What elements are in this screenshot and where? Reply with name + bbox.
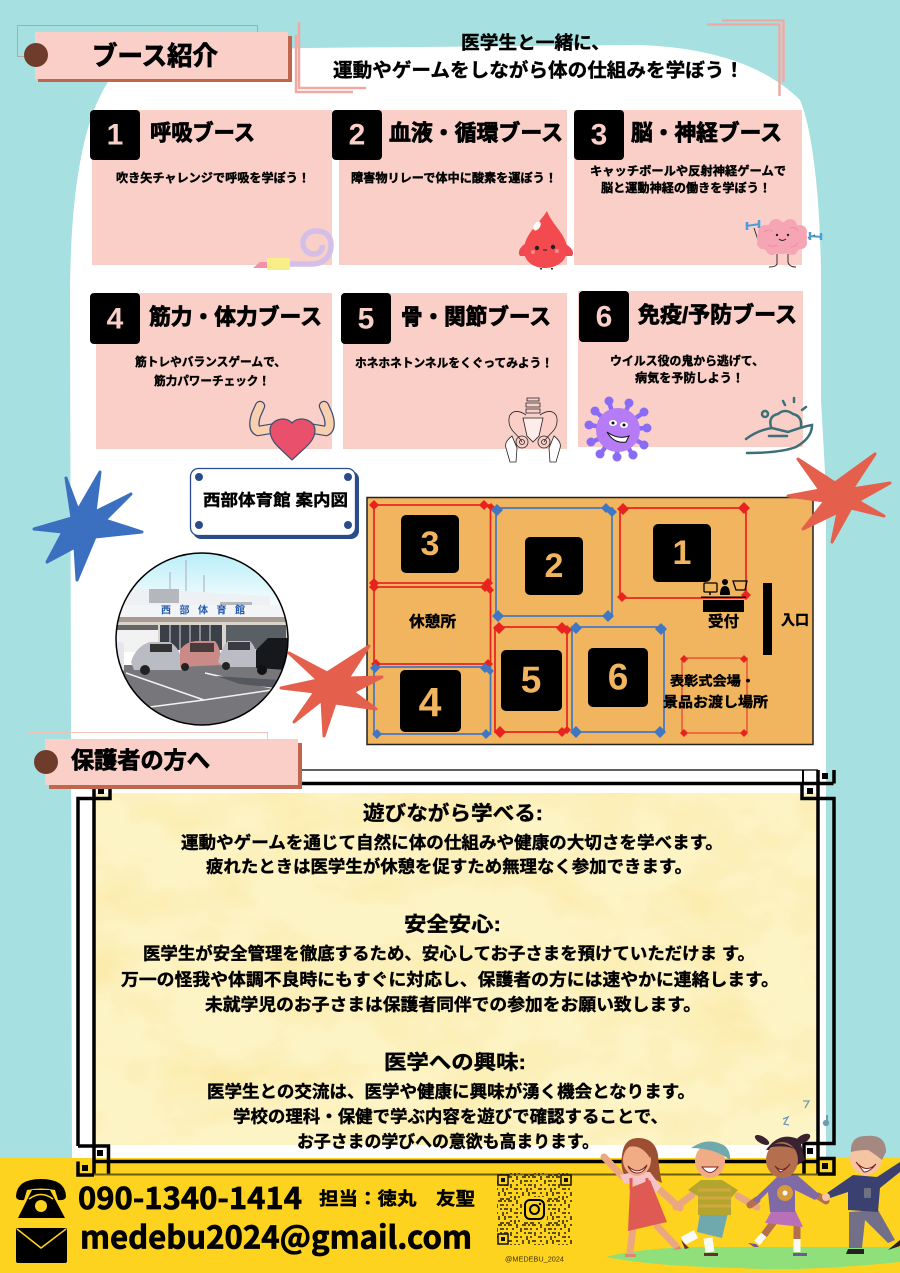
panel: booth 3: 脳・神経ブース [631, 120, 782, 146]
panel: booth 1: 吹き矢チャレンジで呼吸を学ぼう！ [116, 170, 310, 185]
section: interest in medicine [207, 1051, 695, 1152]
map badge 1: 1 [673, 534, 691, 572]
header: message to parents [28, 732, 302, 789]
child 1: girl in red dress [604, 1138, 681, 1257]
icon: pelvis bones [506, 398, 560, 462]
section: interest in medicine: お子さまの学びへの意欲も高まります。 [297, 1132, 599, 1152]
contact person: 担当：徳丸 友聖 [319, 1188, 475, 1209]
label: entrance: 入口 [781, 612, 809, 628]
panel: booth 5 [341, 293, 567, 462]
section: interest in medicine: 学校の理科・保健で学ぶ内容を遊びで確認することで、 [233, 1106, 668, 1126]
map badge 2: 2 [545, 547, 563, 585]
label: award venue: 景品お渡し場所 [663, 694, 768, 710]
panel: booth 6: ウイルス役の鬼から逃げて、 [610, 353, 764, 368]
panel: booth 3 [574, 110, 822, 267]
decorative bracket: right [707, 20, 784, 96]
panel: booth 4: 筋力・体力ブース [149, 304, 322, 330]
label: award venue [663, 674, 768, 710]
zone 2 blue outline [491, 503, 617, 622]
zone 1 red outline [617, 502, 751, 602]
panel: booth 2: 2 [349, 118, 365, 152]
map badge 4: 4 [419, 679, 442, 725]
header: message to parents: 保護者の方へ [71, 747, 210, 773]
section: learning through play: 疲れたときは医学生が休憩を促すため無理なく参加できます。 [206, 856, 692, 876]
panel: booth 1: 呼吸ブース [150, 120, 255, 146]
map badge 3 [401, 515, 459, 573]
panel: message to parents [78, 770, 834, 1175]
photo: gymnasium building: 西 部 体 育 館 [161, 604, 245, 616]
panel: booth 5: 5 [358, 302, 374, 336]
illustration: children holding hands [604, 1101, 900, 1269]
section: safety: 万一の怪我や体調不良時にもすぐに対応し、保護者の方には速やかに連絡します。 [121, 970, 779, 990]
child 3: girl in purple top [748, 1132, 826, 1256]
icon: virus character [584, 396, 652, 462]
panel: booth 4: 4 [107, 302, 124, 336]
icon: blood drop [519, 211, 573, 270]
star: red right [788, 454, 890, 542]
header: booth introduction [18, 26, 292, 82]
star: red center [281, 646, 382, 736]
icon: telephone [16, 1179, 66, 1218]
section: safety [121, 913, 779, 1014]
map badge 5: 5 [521, 660, 541, 700]
panel: booth 2 [332, 110, 573, 270]
panel: booth 4: 筋トレやバランスゲームで、 [135, 354, 286, 369]
panel: booth 5: 骨・関節ブース [401, 304, 551, 330]
ornamental frame [78, 770, 834, 1175]
map badge 3: 3 [421, 525, 439, 563]
section: interest in medicine: 医学生との交流は、医学や健康に興味が湧く機会となります。 [207, 1082, 695, 1102]
instagram handle: @MEDEBU_2024 [505, 1254, 564, 1264]
label: reception: 受付 [708, 612, 739, 630]
decorative bracket: left [296, 22, 366, 92]
intro text [333, 32, 744, 82]
zone 4 blue outline [370, 663, 494, 739]
zone 5 red outline [493, 622, 572, 738]
panel: booth 1: 1 [107, 118, 123, 152]
child 2: boy in teal cap [676, 1141, 757, 1256]
map badge 2 [525, 537, 583, 595]
map badge 1 [653, 524, 711, 582]
panel: booth 5: ホネホネトンネルをくぐってみよう！ [355, 356, 553, 370]
section: safety: 医学生が安全管理を徹底するため、安心してお子さまを預けていただけま す。 [143, 944, 755, 964]
section: learning through play: 遊びながら学べる: [363, 801, 543, 825]
star: blue [34, 472, 142, 580]
map badge 4 [400, 670, 461, 732]
yellow textured panel [93, 793, 818, 1145]
photo: gymnasium building [116, 553, 288, 727]
QR code [497, 1173, 572, 1245]
section: safety: 安全安心: [404, 913, 501, 936]
panel: booth 4 [90, 293, 332, 460]
panel: booth 2: 障害物リレーで体中に酸素を運ぼう！ [351, 170, 557, 185]
icon: envelope [16, 1228, 67, 1263]
map badge 6 [588, 648, 648, 707]
icon: heart with muscle arms [254, 406, 330, 460]
panel: booth 3: 脳と運動神経の働きを学ぼう！ [601, 180, 771, 195]
icon: brain with dumbbells [746, 219, 822, 267]
map badge 6: 6 [608, 656, 628, 698]
section: safety: 未就学児のお子さまは保護者同伴での参加をお願い致します。 [205, 994, 701, 1014]
sign: gymnasium guide map [190, 468, 359, 539]
panel: booth 4: 筋力パワーチェック！ [154, 373, 270, 388]
white background blob [70, 45, 826, 1160]
icon: hand washing [746, 398, 812, 453]
section: learning through play [181, 801, 723, 876]
map badge 5 [501, 650, 562, 711]
phone number: 090-1340-1414 [78, 1174, 302, 1218]
panel: booth 3: キャッチボールや反射神経ゲームで [590, 163, 786, 178]
section: interest in medicine: 医学への興味: [384, 1051, 526, 1074]
icon: party blower [253, 231, 331, 270]
icon: reception desk [701, 579, 747, 612]
intro text: 運動やゲームをしながら体の仕組みを学ぼう！ [333, 58, 744, 82]
panel: booth 1 [90, 110, 332, 270]
header: booth introduction: ブース紹介 [92, 41, 218, 71]
icon: instagram [522, 1197, 547, 1222]
floor map [367, 498, 813, 744]
panel: booth 6 [578, 291, 812, 462]
section: learning through play: 運動やゲームを通じて自然に体の仕組みや健康の大切さを学べます。 [181, 832, 723, 852]
intro text: 医学生と一緒に、 [461, 32, 610, 53]
zone 3 red outline [369, 500, 495, 588]
panel: booth 3: 3 [591, 118, 607, 152]
panel: booth 2: 血液・循環ブース [389, 120, 563, 146]
zone rest area red outline [369, 582, 494, 669]
label: rest area: 休憩所 [409, 612, 456, 630]
yellow footer band [0, 1158, 900, 1273]
entrance bar [763, 583, 772, 655]
label: award venue: 表彰式会場・ [670, 674, 755, 688]
zone award red outline [680, 655, 748, 737]
music notes [783, 1101, 828, 1126]
child 4: boy in navy sweater [822, 1136, 900, 1254]
panel: booth 6: 6 [596, 300, 612, 334]
panel: booth 6: 免疫/予防ブース [638, 302, 797, 328]
email address: medebu2024@gmail.com [80, 1212, 472, 1258]
sign: gymnasium guide map: 西部体育館 案内図 [203, 490, 348, 510]
green ground [606, 1247, 900, 1269]
panel: booth 6: 病気を予防しよう！ [635, 370, 744, 385]
zone 6 blue outline [570, 622, 667, 738]
